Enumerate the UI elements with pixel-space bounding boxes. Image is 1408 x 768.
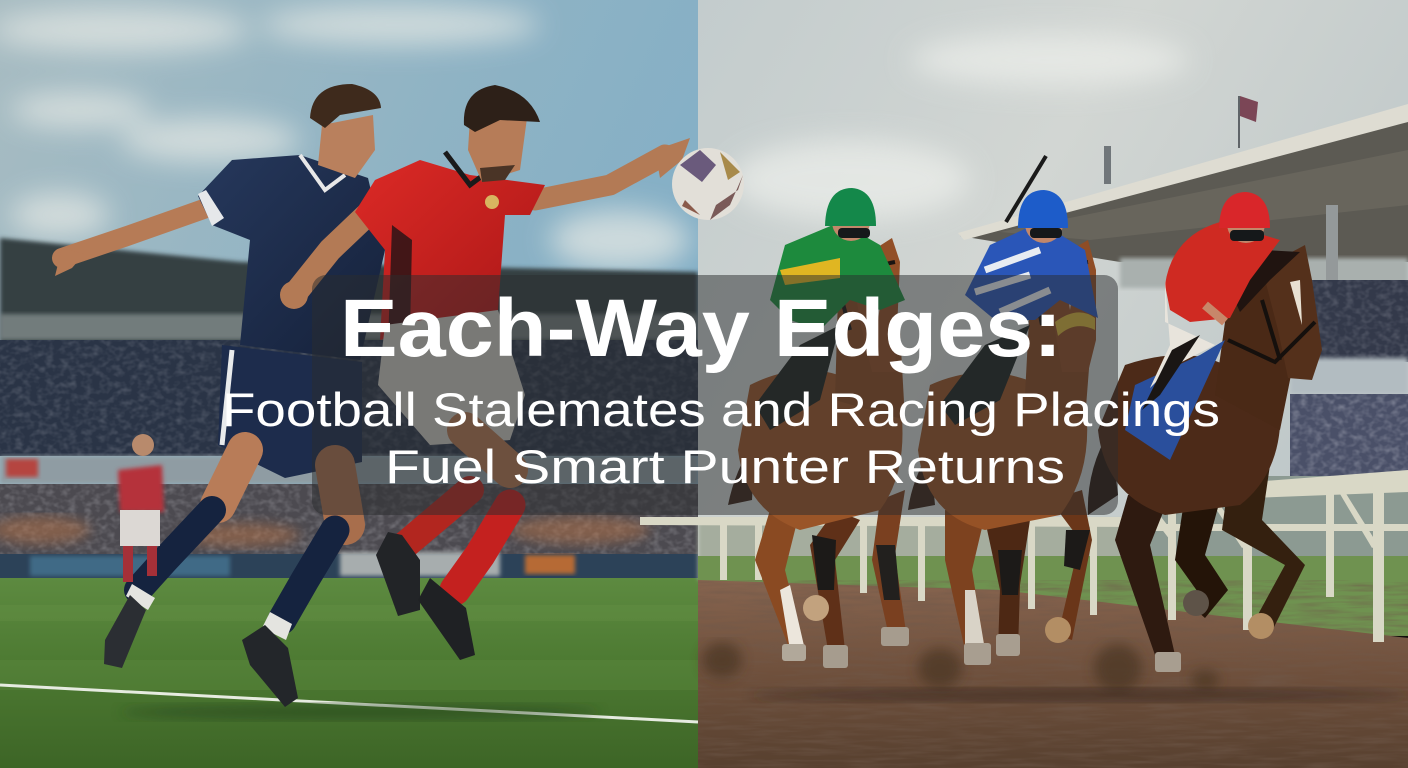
player: navy football kit bbox=[55, 84, 385, 707]
player: red football kit bbox=[280, 85, 690, 660]
icon: flag on grandstand bbox=[1104, 96, 1258, 184]
horse 1 bbox=[728, 238, 909, 668]
legs bbox=[465, 430, 510, 470]
head bbox=[318, 115, 375, 178]
icon: football bbox=[672, 148, 744, 220]
running rail bbox=[640, 470, 1408, 642]
jockey 1: green silks bbox=[755, 188, 905, 430]
shorts bbox=[378, 310, 525, 445]
subtitle line 2: Fuel Smart Punter Returns bbox=[385, 440, 1065, 493]
head bbox=[468, 118, 527, 182]
legs bbox=[218, 450, 245, 505]
rear arm bbox=[62, 205, 215, 258]
right background: racecourse bbox=[640, 0, 1408, 768]
left background: football stadium bbox=[0, 0, 698, 768]
subtitle line 1: Football Stalemates and Racing Placings bbox=[222, 383, 1220, 436]
dust clouds bbox=[702, 642, 1219, 692]
background footballer bbox=[118, 434, 164, 582]
jockey 2: blue silks with whip bbox=[940, 156, 1098, 425]
jockey 3: red silks bbox=[1125, 192, 1280, 460]
horse 2 bbox=[908, 240, 1096, 665]
horse 3 bbox=[1088, 245, 1322, 672]
outstretched arm bbox=[535, 155, 665, 200]
title panel bbox=[222, 275, 1220, 515]
title: Each-Way Edges: bbox=[340, 283, 1062, 374]
